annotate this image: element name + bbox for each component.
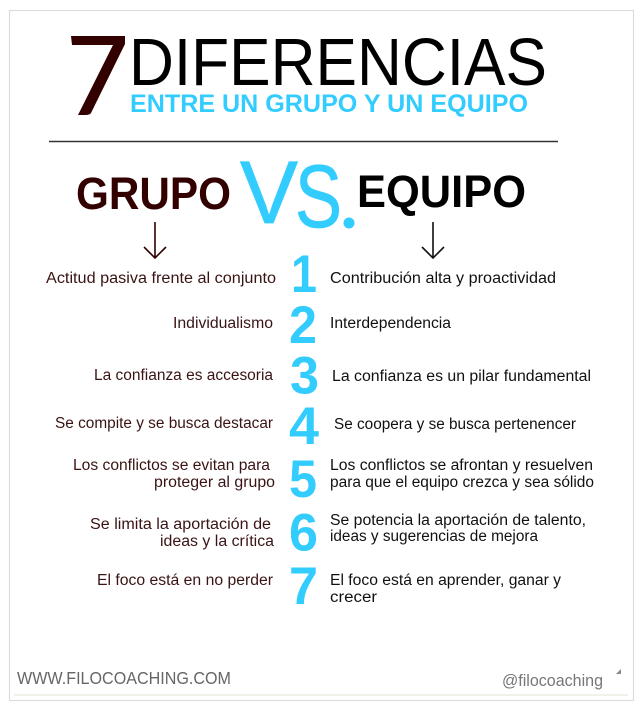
title number 7	[71, 36, 125, 115]
column: grupo: Individualismo	[173, 315, 273, 332]
footer: handle: @filocoaching	[502, 671, 603, 690]
numbers: 2	[289, 296, 317, 355]
column: equipo: ideas y sugerencias de mejora	[330, 528, 538, 545]
heading: grupo: GRUPO	[76, 168, 231, 219]
column: equipo: Los conflictos se afrontan y resuelven	[330, 457, 593, 474]
numbers: 6	[289, 504, 318, 562]
column: equipo: Se potencia la aportación de talento,	[330, 512, 586, 529]
numbers: 3	[290, 346, 319, 406]
heading: VS	[240, 142, 354, 246]
subtitle: ENTRE UN GRUPO Y UN EQUIPO	[130, 90, 528, 118]
column: grupo: El foco está en no perder	[97, 572, 273, 589]
numbers: 1	[291, 245, 317, 304]
footer: website: WWW.FILOCOACHING.COM	[17, 668, 231, 688]
column: grupo: ideas y la crítica	[160, 533, 274, 550]
numbers: 4	[289, 397, 320, 456]
column: equipo: para que el equipo crezca y sea sólido	[330, 474, 594, 491]
column: grupo: Se compite y se busca destacar	[55, 415, 273, 432]
column: equipo: Se coopera y se busca pertenencer	[334, 416, 576, 433]
column: equipo: crecer	[330, 589, 377, 606]
heading: VS: .	[345, 201, 353, 232]
column: equipo: Contribución alta y proactividad	[330, 270, 556, 287]
title	[71, 25, 547, 118]
column: grupo: proteger al grupo	[154, 474, 275, 491]
column: grupo: La confianza es accesoria	[94, 367, 273, 384]
heading: VS: S	[295, 146, 342, 246]
heading: VS: V	[240, 142, 298, 242]
column: equipo: El foco está en aprender, ganar y	[330, 572, 561, 589]
icon: corner mark	[616, 669, 621, 674]
numbers	[289, 245, 320, 616]
column: equipo: Interdependencia	[330, 315, 451, 332]
column: grupo: Actitud pasiva frente al conjunto	[46, 270, 276, 287]
arrow: equipo	[422, 222, 444, 258]
heading: equipo: EQUIPO	[357, 166, 526, 217]
title word: DIFERENCIAS	[129, 25, 547, 100]
column: grupo: Se limita la aportación de	[90, 516, 271, 533]
column: grupo	[46, 270, 276, 589]
arrow: grupo	[144, 222, 166, 258]
numbers: 7	[289, 557, 318, 616]
numbers: 5	[289, 450, 317, 509]
column: equipo	[330, 270, 594, 606]
column: equipo: La confianza es un pilar fundamental	[332, 368, 591, 385]
column: grupo: Los conflictos se evitan para	[73, 457, 270, 474]
